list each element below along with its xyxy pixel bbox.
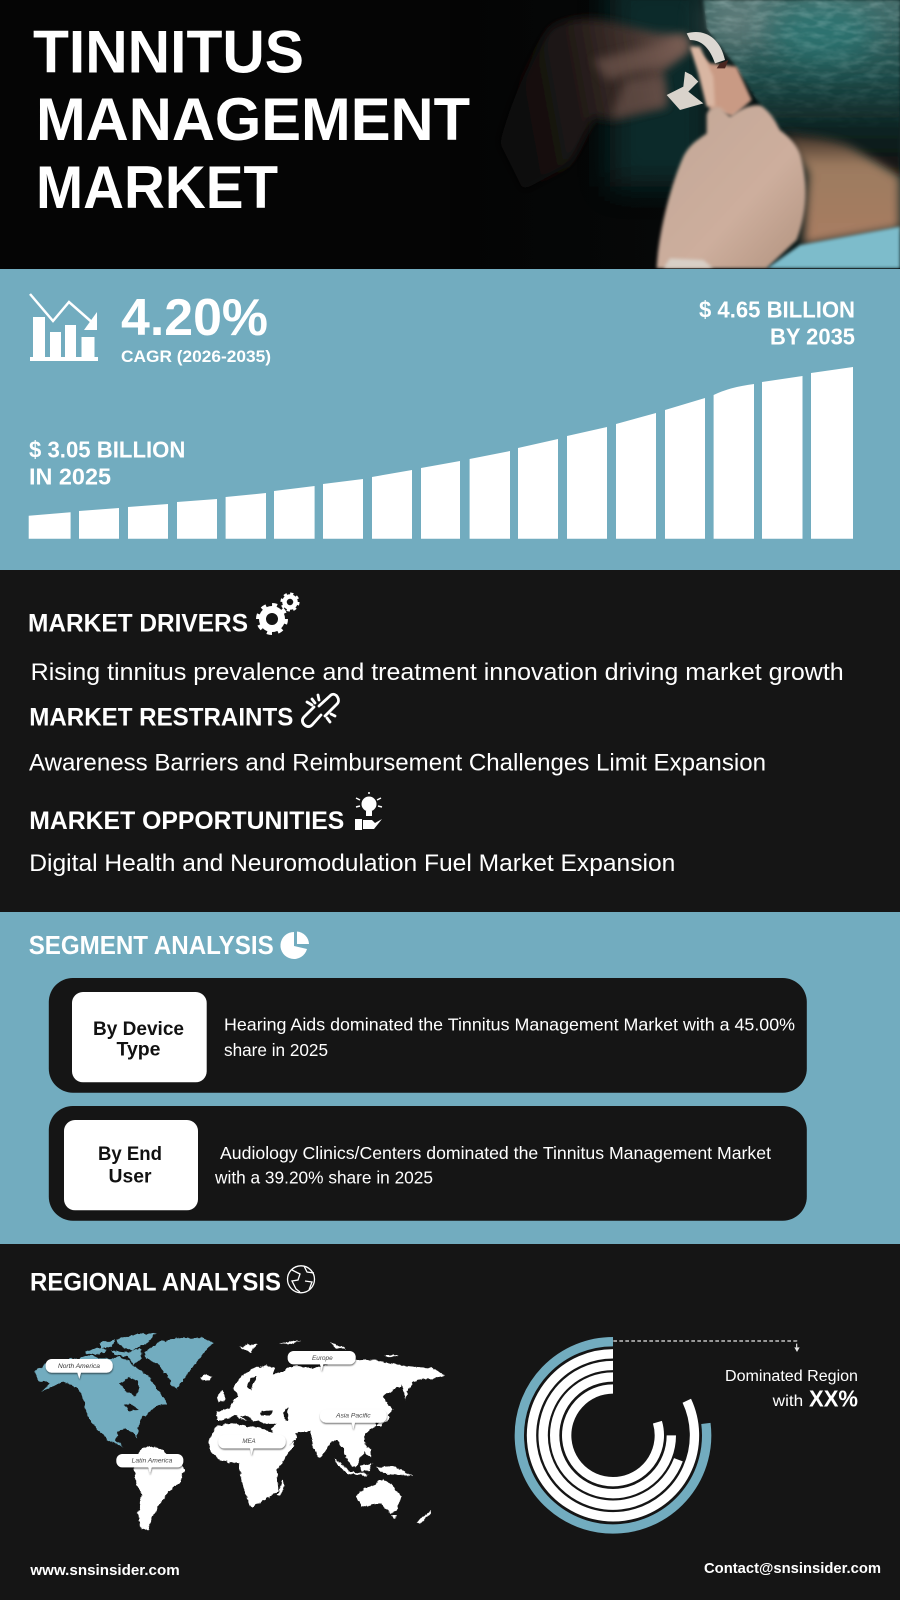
text: market drivers: Rising tinnitus prevalence and treatment innovation driving market growth bbox=[31, 659, 844, 686]
icon: idea in hand bbox=[355, 792, 382, 830]
water cut-outs in Eurasia bbox=[240, 1376, 288, 1421]
label: Europe bbox=[288, 1351, 356, 1371]
label: Latin America: Latin America bbox=[132, 1458, 173, 1465]
panel: market dynamics bbox=[0, 570, 900, 912]
title: MARKET bbox=[36, 154, 278, 221]
footer: contact email: Contact@snsinsider.com bbox=[704, 1560, 881, 1577]
label: Asia Pacific: Asia Pacific bbox=[335, 1413, 371, 1420]
card: by end user: By End bbox=[98, 1144, 162, 1165]
heading: segment analysis: SEGMENT ANALYSIS bbox=[29, 930, 274, 960]
label: MEA bbox=[218, 1435, 286, 1455]
label: North America: North America bbox=[58, 1363, 100, 1370]
callout: dominated region: XX% bbox=[809, 1386, 858, 1412]
label: MEA: MEA bbox=[242, 1438, 256, 1445]
end value label: BY 2035 bbox=[770, 324, 855, 350]
photo: hands fitting a hearing aid bbox=[510, 0, 900, 268]
end value label: $ 4.65 BILLION bbox=[699, 297, 855, 323]
inland waters bbox=[120, 1377, 139, 1411]
footer: website: www.snsinsider.com bbox=[29, 1562, 180, 1579]
card: by device type: By Device bbox=[93, 1019, 184, 1040]
callout: dominated region bbox=[725, 1368, 858, 1412]
start value label: $ 3.05 BILLION bbox=[29, 436, 185, 462]
icon: gears bbox=[258, 594, 298, 633]
text: market restraints: Awareness Barriers and Reimbursement Challenges Limit Expansion bbox=[29, 750, 766, 777]
card: by end user: Audiology Clinics/Centers dominated the Tinnitus Management Market bbox=[220, 1143, 771, 1163]
panel: market size bbox=[0, 269, 900, 570]
card: by device type bbox=[49, 978, 807, 1093]
heading: market restraints: MARKET RESTRAINTS bbox=[29, 704, 293, 732]
world map bbox=[35, 1333, 444, 1530]
title: MANAGEMENT bbox=[36, 86, 470, 153]
header panel bbox=[0, 0, 900, 269]
region: North America bbox=[35, 1333, 213, 1446]
CAGR value: CAGR (2026-2035) bbox=[121, 347, 271, 366]
callout: dominated region: Dominated Region bbox=[725, 1368, 858, 1385]
label: Europe: Europe bbox=[312, 1355, 333, 1362]
card: by device type: Type bbox=[116, 1040, 160, 1061]
start value label bbox=[29, 436, 185, 489]
callout: dominated region: with bbox=[772, 1393, 803, 1410]
panel: segment analysis bbox=[0, 912, 900, 1244]
card: by end user bbox=[49, 1106, 807, 1221]
icon: broken chain bbox=[302, 694, 338, 727]
bar chart bbox=[29, 367, 853, 539]
start value label: IN 2025 bbox=[29, 463, 111, 489]
heading: market opportunities: MARKET OPPORTUNITIES bbox=[29, 807, 344, 835]
title: TINNITUS bbox=[33, 19, 304, 86]
CAGR value: 4.20% bbox=[121, 289, 268, 347]
icon: chart with falling arrow bbox=[30, 294, 98, 361]
region: rest of world bbox=[133, 1341, 444, 1530]
heading: regional analysis: REGIONAL ANALYSIS bbox=[30, 1269, 281, 1297]
card: by device type: Hearing Aids dominated the Tinnitus Management Market with a 45.00% bbox=[224, 1015, 795, 1035]
label: North America bbox=[46, 1359, 113, 1379]
icon: globe bbox=[288, 1266, 314, 1293]
radial chart bbox=[519, 1341, 800, 1529]
text: market opportunities: Digital Health and Neuromodulation Fuel Market Expansion bbox=[29, 850, 675, 877]
title bbox=[33, 19, 470, 221]
card: by end user: User bbox=[108, 1167, 152, 1188]
card: by device type: share in 2025 bbox=[224, 1040, 328, 1060]
label: Asia Pacific bbox=[320, 1409, 387, 1429]
icon: pie chart bbox=[280, 932, 309, 959]
heading: market drivers: MARKET DRIVERS bbox=[28, 610, 248, 638]
panel: regional analysis bbox=[0, 1244, 900, 1600]
label: Latin America bbox=[116, 1454, 183, 1474]
end value label bbox=[699, 297, 855, 350]
card: by end user: with a 39.20% share in 2025 bbox=[214, 1167, 433, 1187]
